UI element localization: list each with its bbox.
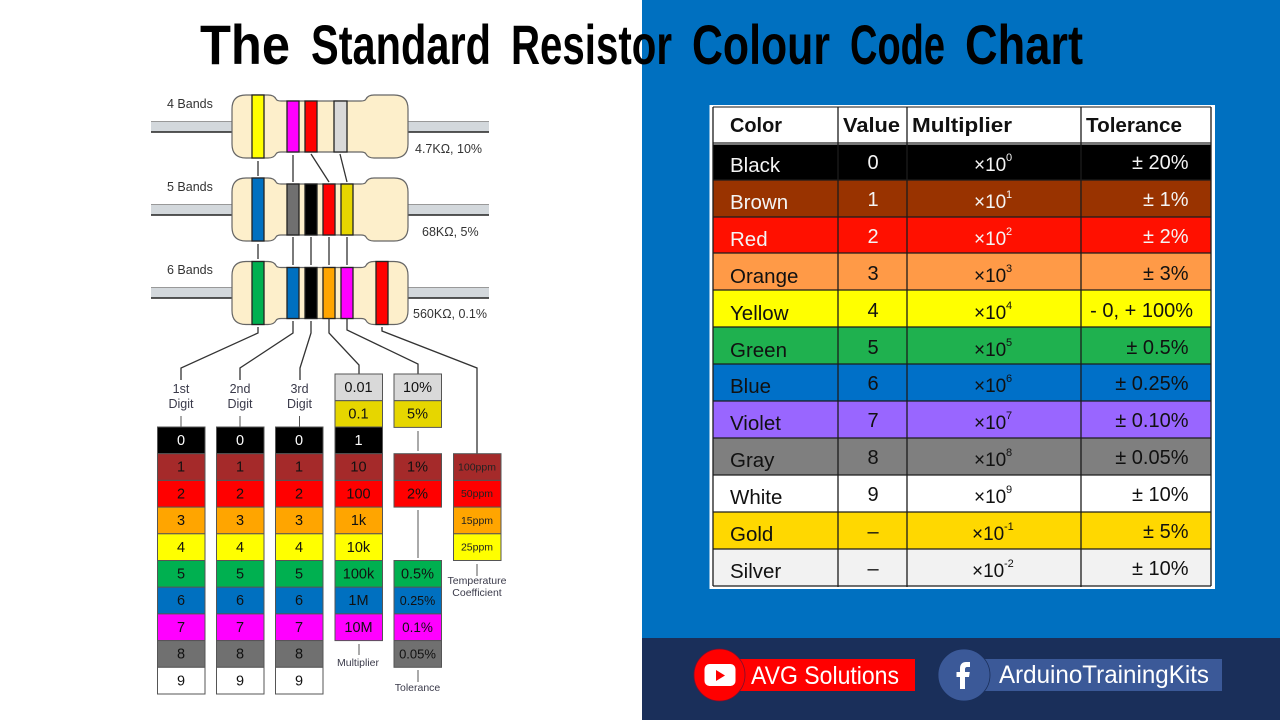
row: violet: 7 [867, 410, 879, 432]
column: 2nd digit: 4 [236, 540, 244, 556]
footer band [642, 638, 1280, 720]
column: 3rd digit: 2 [295, 486, 303, 502]
column: 1st digit: Digit [168, 397, 194, 411]
row: gray: 8 [867, 447, 879, 469]
column: 2nd digit: 1 [236, 460, 244, 476]
column: multiplier: 10M [344, 620, 373, 636]
row: gray: ×10 [974, 450, 1006, 471]
row: red: ± 2% [1143, 226, 1189, 248]
row: gray: Gray [730, 449, 775, 472]
column: temperature coefficient: 100ppm [458, 462, 496, 474]
resistor: 6 bands: 560KΩ, 0.1% [413, 307, 487, 321]
row: violet [730, 410, 1189, 435]
column: 2nd digit: 8 [236, 647, 244, 663]
column: 1st digit: 5 [177, 566, 185, 582]
row: yellow [730, 300, 1193, 325]
resistor: 5 bands: 5 Bands [167, 180, 213, 194]
column: temperature coefficient: 25ppm [461, 542, 493, 554]
column: multiplier [335, 374, 382, 669]
row: brown: 1 [1006, 189, 1012, 201]
badge: Facebook ArduinoTrainingKits [938, 649, 1222, 701]
column: multiplier: 0.01 [344, 380, 373, 396]
row: gold: – [867, 521, 879, 543]
row: gold [730, 521, 1189, 546]
row: black: ×10 [974, 155, 1006, 176]
title [200, 13, 1083, 76]
column: 1st digit: 1st [173, 382, 190, 396]
column: 1st digit: 1 [177, 460, 185, 476]
row: gray: 8 [1006, 447, 1012, 459]
column: multiplier: 1k [351, 513, 367, 529]
icon: Facebook [938, 649, 990, 701]
column: 3rd digit: 1 [295, 460, 303, 476]
row: orange: Orange [730, 265, 798, 288]
column: 3rd digit: 7 [295, 620, 303, 636]
row: white: 9 [1006, 484, 1012, 496]
column: tolerance: 5% [407, 407, 428, 423]
column: 3rd digit: 9 [295, 673, 303, 689]
column: multiplier: 10 [350, 460, 367, 476]
column: temperature coefficient: 50ppm [461, 488, 493, 500]
row: blue: Blue [730, 375, 771, 398]
column: tolerance: 1% [407, 460, 428, 476]
row: black: ± 20% [1132, 152, 1189, 174]
column: 3rd digit: 0 [295, 433, 303, 449]
row: silver: -2 [1004, 558, 1014, 570]
row: yellow: 4 [867, 300, 879, 322]
row: silver [730, 558, 1189, 583]
title: Standard [311, 13, 491, 76]
resistor: 4 bands: 4.7KΩ, 10% [415, 142, 482, 156]
row: orange: 3 [1006, 263, 1012, 275]
panel: resistor diagrams [151, 95, 489, 454]
row: blue [730, 373, 1189, 398]
row: yellow: ×10 [974, 303, 1006, 324]
row: white: White [730, 486, 782, 509]
row: brown: ×10 [974, 192, 1006, 213]
column: tolerance [394, 374, 442, 694]
row: white: ×10 [974, 487, 1006, 508]
row: blue: ×10 [974, 376, 1006, 397]
row: gold: ×10 [972, 524, 1004, 545]
column: multiplier: 100 [346, 486, 371, 502]
icon: YouTube [694, 649, 745, 701]
column: 1st digit: 8 [177, 647, 185, 663]
row: red [730, 226, 1189, 251]
column: multiplier: 0.1 [348, 407, 369, 423]
title: Colour [692, 13, 830, 76]
column: multiplier: 1 [354, 433, 363, 449]
column: 2nd digit: 6 [236, 593, 244, 609]
table header row: Color [730, 115, 782, 137]
column: tolerance: 0.1% [402, 620, 433, 635]
column: 1st digit: 9 [177, 673, 185, 689]
column: 3rd digit: 8 [295, 647, 303, 663]
column: 3rd digit: 3 [295, 513, 303, 529]
row: white: 9 [867, 484, 879, 506]
column: 2nd digit: 5 [236, 566, 244, 582]
column: 3rd digit: 4 [295, 540, 303, 556]
badge: YouTube AVG Solutions [694, 649, 915, 701]
title: Chart [965, 13, 1083, 76]
row: green: 5 [1006, 337, 1012, 349]
table header row: Multiplier [912, 115, 1012, 137]
resistor: 6 bands [151, 262, 489, 324]
column: 2nd digit: 2nd [230, 382, 250, 396]
row: orange: 3 [867, 263, 879, 285]
row: gold: -1 [1004, 521, 1014, 533]
title: Resistor [511, 13, 672, 76]
row: gold: Gold [730, 523, 773, 546]
row: black: 0 [1006, 152, 1012, 164]
column: 3rd digit: 3rd [290, 382, 309, 396]
resistor: 5 bands: 68KΩ, 5% [422, 225, 479, 239]
row: red: 2 [1006, 226, 1012, 238]
resistor: 4 bands: 4 Bands [167, 97, 213, 111]
row: silver: ± 10% [1132, 558, 1189, 580]
row: orange: ×10 [974, 266, 1006, 287]
column: 2nd digit [216, 382, 264, 694]
row: red: ×10 [974, 229, 1006, 250]
row: green: ×10 [974, 340, 1006, 361]
table frame [710, 105, 1215, 589]
table: colour code [710, 105, 1215, 589]
row: yellow: - 0, + 100% [1090, 300, 1193, 322]
row: orange [730, 263, 1189, 288]
resistor: 6 bands: 6 Bands [167, 263, 213, 277]
table header row: Value [843, 115, 900, 137]
row: violet: Violet [730, 412, 781, 435]
column: 3rd digit [276, 382, 323, 694]
panel: band value chart [158, 374, 507, 694]
column: multiplier: 10k [347, 540, 371, 556]
column: multiplier: 100k [343, 566, 375, 582]
row: silver: Silver [730, 560, 781, 583]
table grid [713, 107, 1211, 587]
column: 2nd digit: 3 [236, 513, 244, 529]
column: 1st digit: 0 [177, 433, 185, 449]
resistor: 4 bands [151, 95, 489, 158]
column: tolerance: 2% [407, 486, 428, 502]
row: red: 2 [867, 226, 879, 248]
row: gold: ± 5% [1143, 521, 1189, 543]
resistor: 5 bands [151, 178, 489, 241]
column: multiplier: Multiplier [337, 657, 380, 669]
column: 1st digit: 7 [177, 620, 185, 636]
column: 2nd digit: 2 [236, 486, 244, 502]
row: red: Red [730, 228, 768, 251]
column: 3rd digit: 5 [295, 566, 303, 582]
column: tolerance: Tolerance [395, 682, 440, 694]
row: green [730, 337, 1189, 362]
row: violet: ± 0.10% [1115, 410, 1189, 432]
title: Code [850, 13, 945, 76]
column: 2nd digit: 0 [236, 433, 244, 449]
row: silver: ×10 [972, 561, 1004, 582]
column: 1st digit: 3 [177, 513, 185, 529]
row: blue: 6 [1006, 373, 1012, 385]
blue background panel [642, 0, 1280, 638]
row: gray [730, 447, 1189, 472]
column: 1st digit [158, 382, 205, 694]
row: green: 5 [867, 337, 879, 359]
badge: Facebook ArduinoTrainingKits: ArduinoTrainingKits [999, 661, 1209, 689]
row: yellow: 4 [1006, 300, 1012, 312]
row: black: Black [730, 154, 781, 177]
row: violet: ×10 [974, 413, 1006, 434]
column: tolerance: 0.25% [400, 594, 435, 608]
row: white: ± 10% [1132, 484, 1189, 506]
row: yellow: Yellow [730, 302, 789, 325]
row: orange: ± 3% [1143, 263, 1189, 285]
column: temperature coefficient: 15ppm [461, 515, 493, 527]
row: violet: 7 [1006, 410, 1012, 422]
row: silver: – [867, 558, 879, 580]
column: 1st digit: 4 [177, 540, 185, 556]
column: 2nd digit: Digit [227, 397, 253, 411]
row: green: Green [730, 339, 787, 362]
row: black [730, 152, 1189, 177]
table header row: Tolerance [1086, 115, 1182, 137]
column: 1st digit: 2 [177, 486, 185, 502]
badge: YouTube AVG Solutions: AVG Solutions [751, 662, 899, 690]
column: tolerance: 0.05% [399, 646, 436, 661]
row: brown [730, 189, 1189, 214]
row: gray: ± 0.05% [1115, 447, 1189, 469]
column: 3rd digit: Digit [287, 397, 313, 411]
column: 3rd digit: 6 [295, 593, 303, 609]
column: multiplier: 1M [348, 593, 369, 609]
row: green: ± 0.5% [1126, 337, 1189, 359]
row: brown: 1 [867, 189, 879, 211]
row: blue: ± 0.25% [1115, 373, 1189, 395]
column: 2nd digit: 7 [236, 620, 244, 636]
row: blue: 6 [867, 373, 879, 395]
column: temperature coefficient: Coefficient [452, 587, 502, 599]
row: white [730, 484, 1189, 509]
row: brown: ± 1% [1143, 189, 1189, 211]
column: temperature coefficient: Temperature [448, 575, 507, 587]
column: temperature coefficient [448, 454, 507, 599]
title: The [200, 13, 290, 76]
column: 2nd digit: 9 [236, 673, 244, 689]
column: tolerance: 0.5% [401, 566, 434, 582]
column: tolerance: 10% [403, 380, 432, 396]
column: 1st digit: 6 [177, 593, 185, 609]
row: black: 0 [867, 152, 879, 174]
row fills [713, 145, 1211, 586]
connector lines between bands [181, 154, 477, 454]
row: brown: Brown [730, 191, 788, 214]
table header row [713, 107, 1211, 142]
